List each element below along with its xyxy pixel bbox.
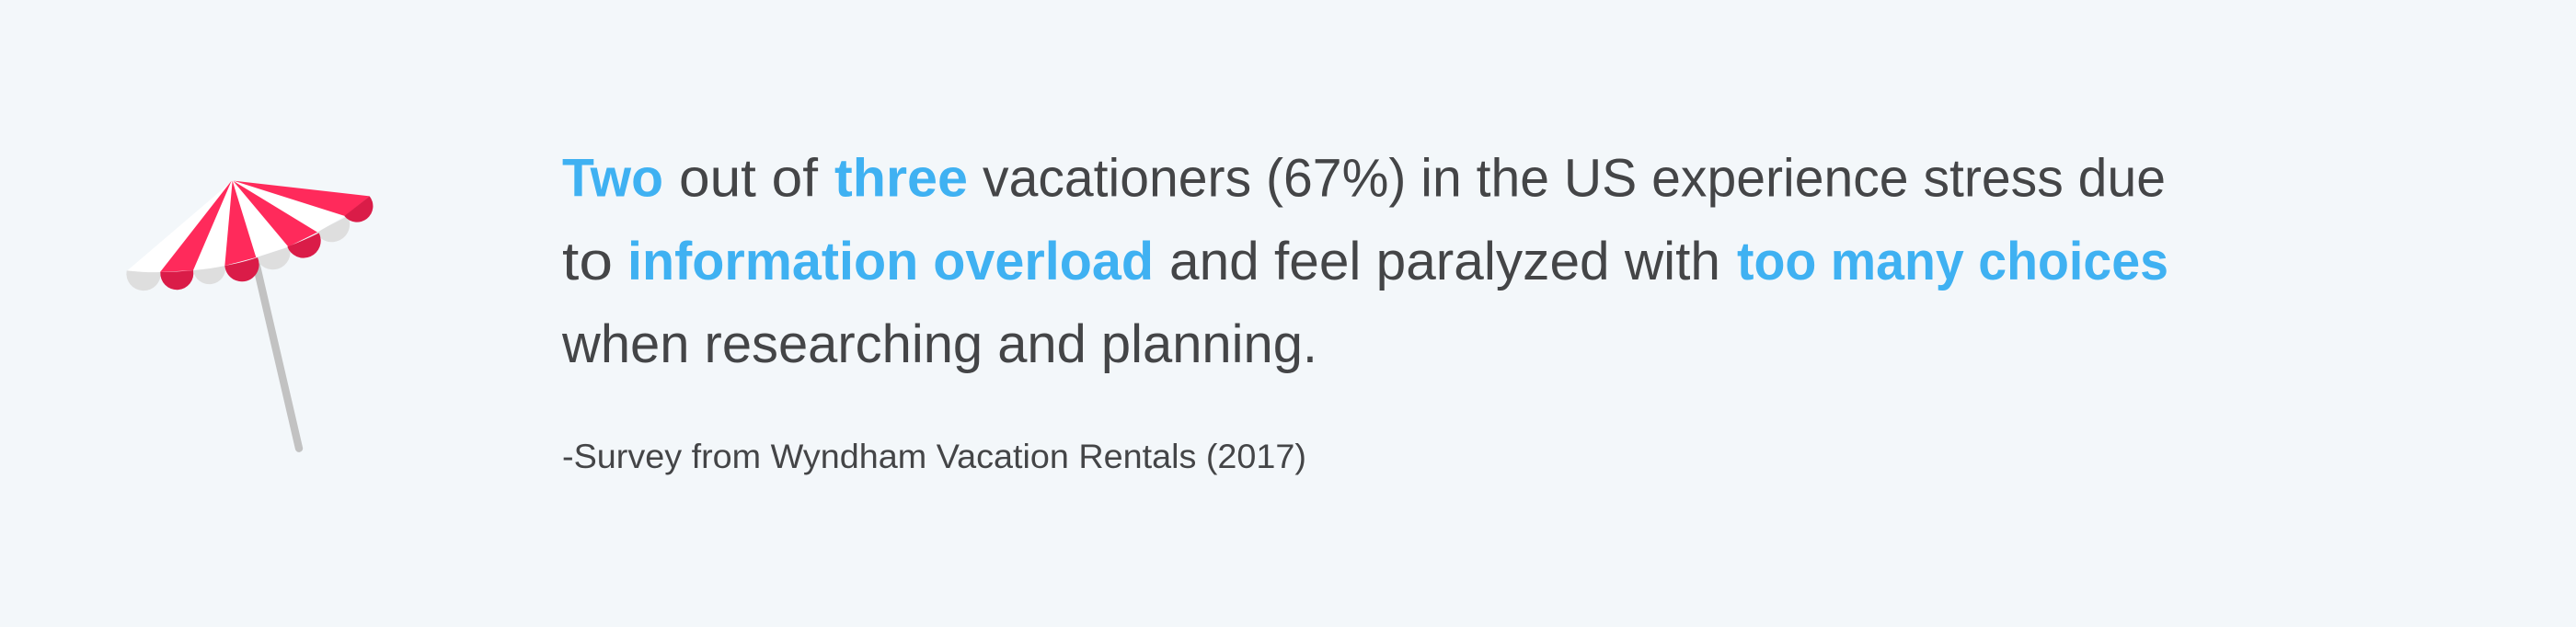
grey scallops xyxy=(126,216,350,291)
umbrella pole xyxy=(256,264,299,449)
line 3: when researching and planning. xyxy=(561,314,1317,374)
red canopy panels xyxy=(160,181,370,272)
source citation: -Survey from Wyndham Vacation Rentals (2017) xyxy=(562,438,1306,475)
white canopy panels xyxy=(127,181,345,272)
line 2: too many choices xyxy=(1737,232,2168,291)
icon: beach umbrella xyxy=(126,181,373,449)
line 1: three xyxy=(834,149,968,208)
line 1: out of xyxy=(679,149,819,208)
line 2 xyxy=(562,232,2168,291)
dark red scallops xyxy=(160,196,373,290)
line 2: to xyxy=(562,232,613,291)
line 1: Two xyxy=(562,149,663,208)
line 2: and feel paralyzed with xyxy=(1169,232,1720,291)
line 1: vacationers (67%) in the US experience stress due xyxy=(983,149,2166,208)
line 2: information overload xyxy=(627,232,1154,291)
quote text xyxy=(561,149,2168,374)
